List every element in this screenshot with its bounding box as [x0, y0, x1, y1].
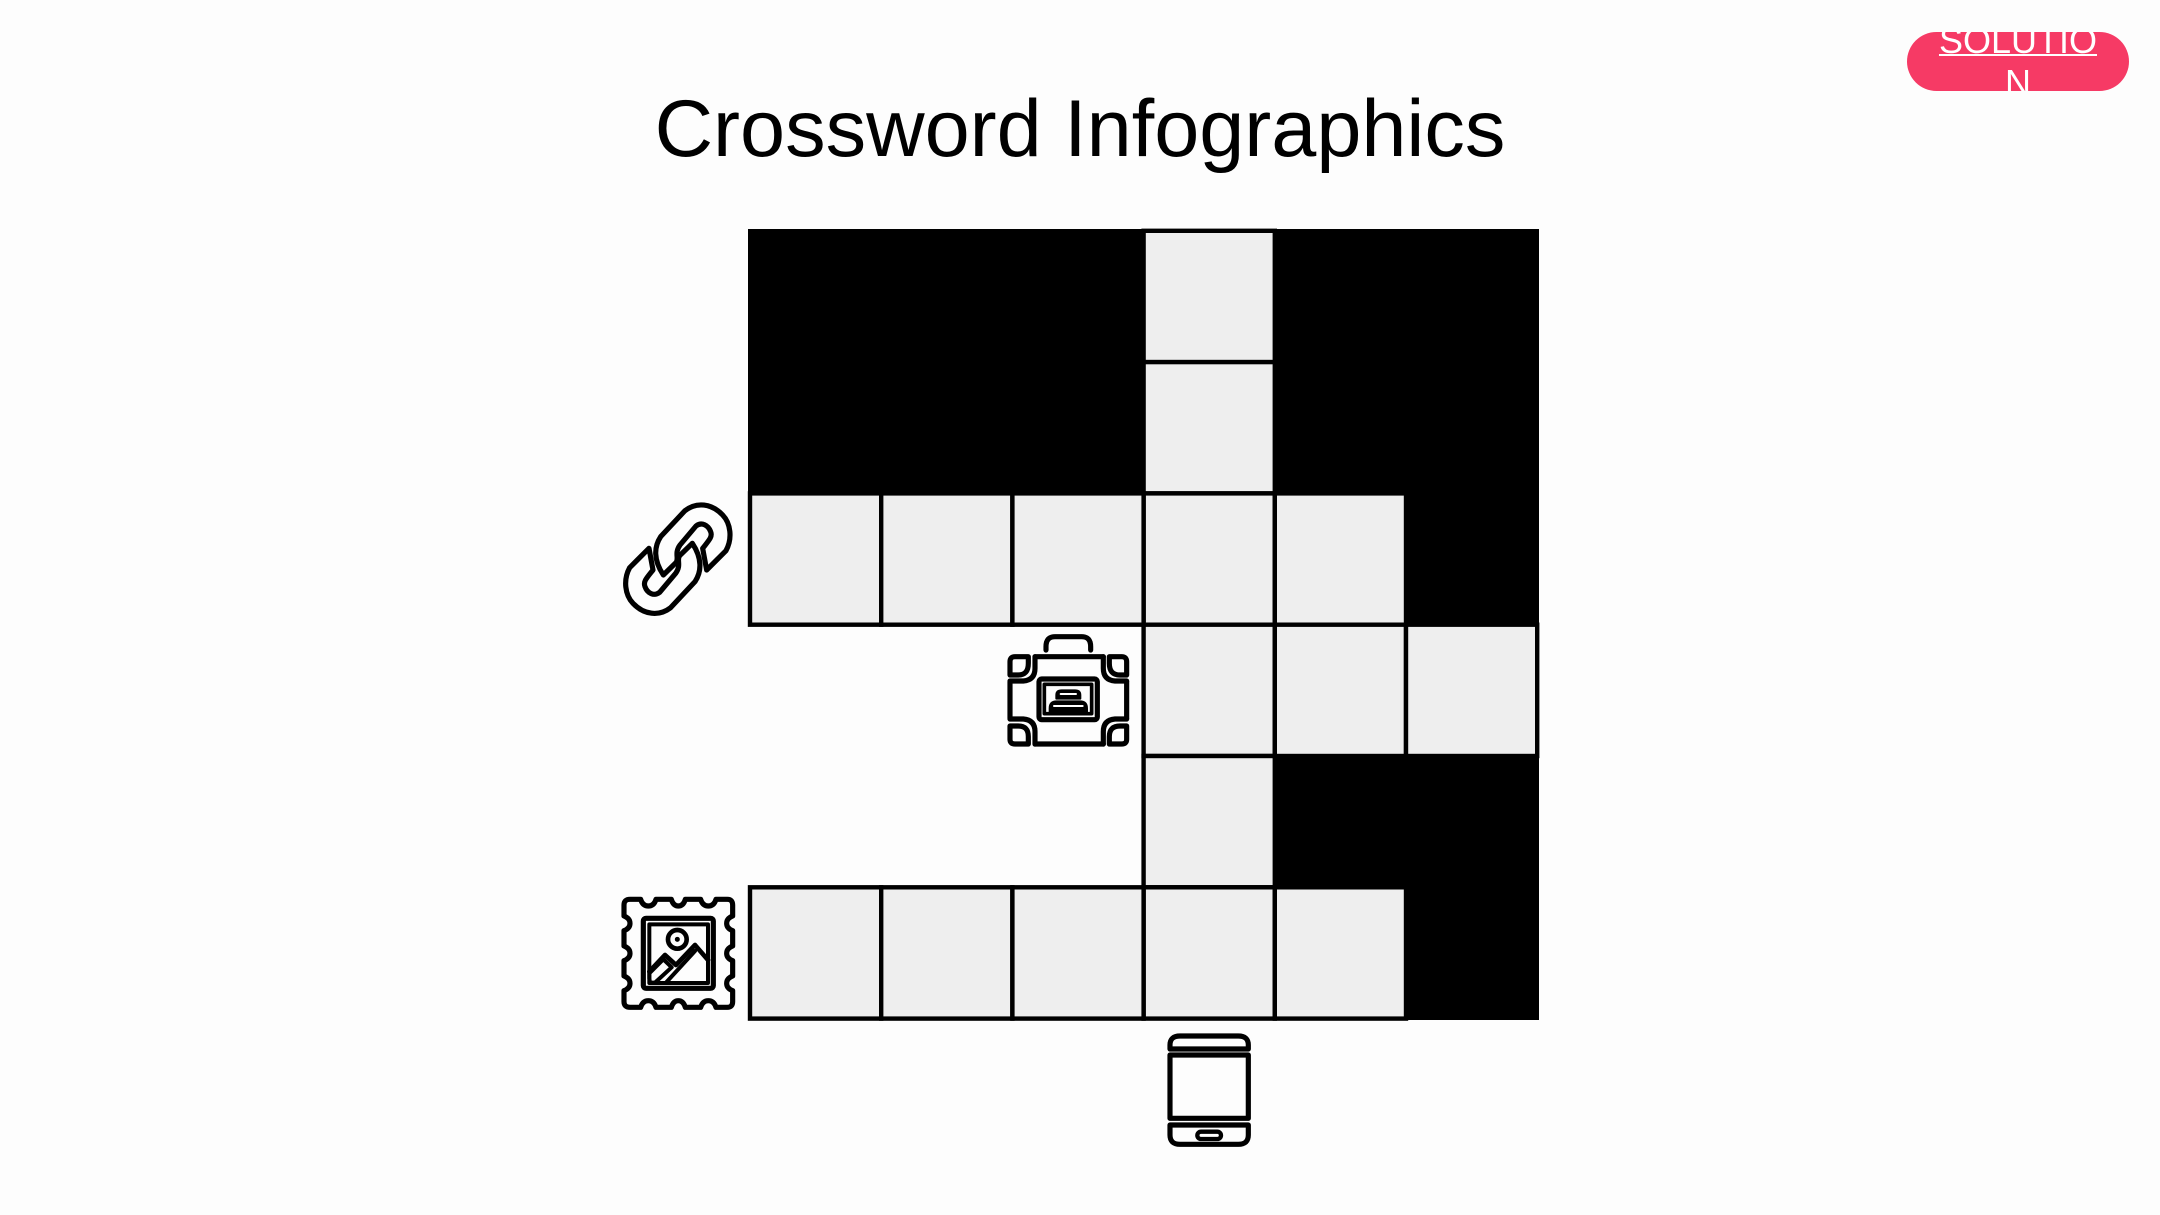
blocked cell: row six: [1403, 885, 1539, 1020]
blocked cell: right of row three: [1403, 493, 1539, 626]
icon: chain link: [626, 505, 730, 613]
blocked cells: row five: [1274, 754, 1539, 889]
icon: picture stamp: [624, 899, 733, 1007]
across word: stamp row cells: [750, 887, 1406, 1019]
title: Crossword Infographics: [655, 84, 1505, 174]
icon: briefcase: [1010, 637, 1127, 744]
blocked cells: top left: [748, 229, 1146, 493]
crossword grid: [748, 229, 1539, 1020]
blocked cells: top right: [1274, 229, 1539, 624]
down word cells: [1144, 231, 1275, 1019]
across word: briefcase row cells: [1275, 625, 1537, 756]
icon: smartphone: [1170, 1036, 1248, 1144]
across word: link row cells: [750, 493, 1406, 625]
